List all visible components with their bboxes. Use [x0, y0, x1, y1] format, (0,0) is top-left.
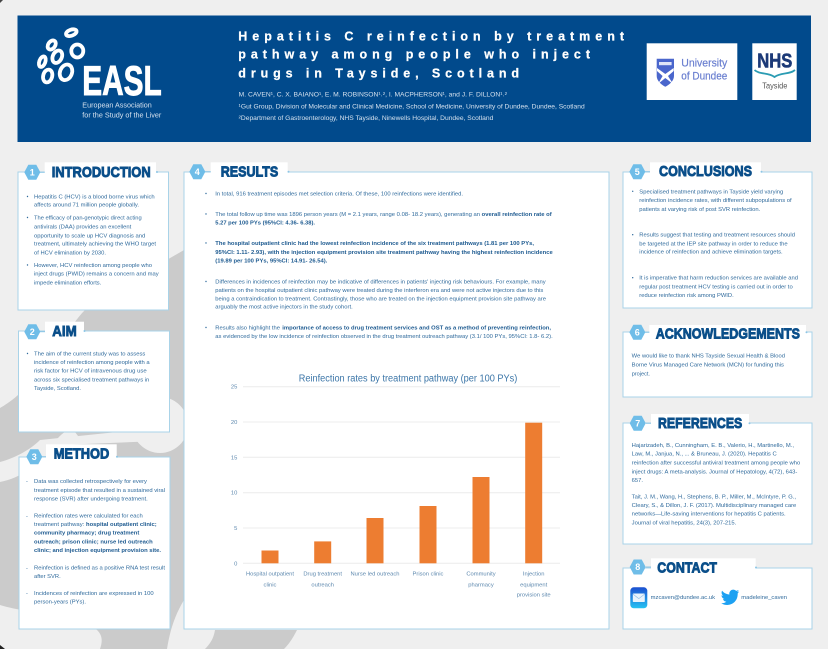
- body text: importance of access to drug treatment services and OST as a method of preventing reinfection,: [282, 325, 551, 331]
- body text: clinic; and injection equipment provision site.: [34, 548, 161, 554]
- email address: mzcaven@dundee.ac.uk: [651, 595, 715, 601]
- x axis labels: equipment: [520, 582, 548, 588]
- body text: impede elimination efforts.: [34, 280, 102, 286]
- x axis labels: clinic: [264, 582, 277, 588]
- body text: [205, 191, 553, 340]
- body text: -: [26, 565, 28, 571]
- body text: hospital outpatient clinic;: [86, 522, 157, 528]
- body text: incidence of reinfection and achieve elimination targets.: [639, 250, 783, 256]
- heading tab: 1: [30, 168, 35, 178]
- body text: patients at varying risk of post SVR reinfection.: [639, 207, 761, 213]
- title: pathway among people who inject: [238, 48, 591, 62]
- body text: However, HCV reinfection among people who: [34, 263, 152, 269]
- icon: Dundee shield: [657, 59, 674, 87]
- x axis labels: [246, 572, 551, 598]
- x axis labels: outreach: [311, 582, 334, 588]
- body text: Results suggest that testing and treatment resources should: [639, 233, 795, 239]
- body text: affects around 71 million people globally.: [34, 203, 139, 209]
- NHS Tayside logo: Tayside: [762, 81, 788, 90]
- y axis labels: 10: [231, 491, 237, 497]
- heading tab: 7: [635, 418, 640, 428]
- body text: Data was collected retrospectively for every: [34, 479, 147, 485]
- body text: response (SVR) after undergoing treatment.: [34, 497, 148, 503]
- body text: [27, 351, 151, 392]
- body text: risk factor for HCV of intravenous drug use: [34, 369, 147, 375]
- y axis labels: 5: [234, 526, 237, 532]
- chart title: Reinfection rates by treatment pathway (per 100 PYs): [299, 373, 517, 384]
- heading tab: CONTACT: [657, 559, 717, 576]
- body text: 95%CI: 1.11- 2.93), with the injection equipment provision site treatment pathway having the highest reinfection incidence: [215, 250, 553, 256]
- heading tab: 3: [32, 452, 37, 462]
- body text: Differences in incidences of reinfection may be indicative of differences in patients' injecting risk behaviours. For example, many: [215, 279, 546, 285]
- title: Hepatitis C reinfection by treatment: [238, 30, 625, 44]
- body text: Reinfection is defined as a positive RNA test result: [34, 565, 165, 571]
- header banner: [18, 16, 811, 142]
- x axis labels: Injection: [523, 572, 544, 578]
- body text: -: [26, 591, 28, 597]
- body text: We would like to thank NHS Tayside Sexual Health & Blood: [632, 353, 785, 359]
- icon: twitter bird: [721, 590, 739, 605]
- panel: results: [184, 162, 609, 629]
- body text: being a contraindication to treatment. Contrastingly, those who are treated on the injection equipment provision site pathway are: [215, 296, 546, 302]
- bars: [262, 423, 542, 563]
- x axis labels: Nurse led outreach: [351, 572, 399, 578]
- x axis labels: Community: [466, 572, 496, 578]
- panel: aim: [18, 322, 170, 432]
- twitter handle: madeleine_caven: [741, 595, 787, 601]
- body text: project.: [632, 372, 650, 378]
- body text: (19.89 per 100 PYs, 95%CI: 14.91- 26.54).: [215, 258, 328, 264]
- body text: networks—Life-saving interventions for hepatitis C patients.: [632, 512, 786, 518]
- University of Dundee logo: University: [681, 58, 728, 70]
- heading tab: CONCLUSIONS: [659, 163, 752, 180]
- body text: antivirals (DAA) provides an excellent: [34, 225, 132, 231]
- x axis labels: pharmacy: [468, 582, 494, 588]
- panel: conclusions: [623, 162, 812, 308]
- body text: Reinfection rates were calculated for each: [34, 514, 143, 520]
- body text: [26, 479, 165, 606]
- body text: -: [26, 479, 28, 485]
- panel: references: [623, 414, 812, 544]
- body text: The efficacy of pan-genotypic direct acting: [34, 215, 142, 221]
- body text: reinfection after successful antiviral treatment among people who: [632, 461, 800, 467]
- y axis labels: 0: [234, 561, 237, 567]
- body text: In total, 916 treatment episodes met selection criteria. Of these, 100 reinfections were identified.: [215, 191, 463, 197]
- logo caption: [82, 102, 162, 119]
- body text: Hajarizadeh, B., Cunningham, E. B., Valerio, H., Martinello, M.,: [632, 443, 794, 449]
- body text: inject drugs (PWID) remains a concern and may: [34, 272, 159, 278]
- heading tab: 6: [635, 328, 640, 338]
- body text: [27, 194, 159, 286]
- body text: patients on the hospital outpatient clinic pathway were treated during the interferon era and were not active injectors due to this: [215, 288, 544, 294]
- logo wordmark: EASL: [82, 57, 162, 104]
- panel: contact: [623, 558, 812, 629]
- body text: 657.: [632, 478, 643, 484]
- y axis labels: [231, 385, 237, 567]
- y axis labels: 15: [231, 455, 237, 461]
- x axis labels: provision site: [517, 592, 551, 598]
- body text: -: [26, 514, 28, 520]
- body text: Tayside, Scotland.: [34, 386, 81, 392]
- body text: Law, M., Janjua, N., ... & Bruneau, J. (2020). Hepatitis C: [632, 452, 777, 458]
- body text: community pharmacy; drug treatment: [34, 531, 139, 537]
- body text: 5.27 per 100 PYs (95%CI: 4.36- 6.38).: [215, 220, 315, 226]
- heading tab: 5: [635, 167, 640, 177]
- body text: Incidences of reinfection are expressed in 100: [34, 591, 154, 597]
- authors and affiliations: [239, 92, 585, 122]
- heading tab: RESULTS: [221, 163, 278, 180]
- body text: arguably the most active injectors in the study cohort.: [215, 305, 353, 311]
- body text: Results also highlight the: [215, 325, 280, 331]
- logo caption: European Association: [82, 102, 152, 109]
- body text: treatment episode that resulted in a sustained viral: [34, 488, 165, 494]
- body text: Borne Virus Managed Care Network (MCN) for funding this: [632, 363, 784, 369]
- panel: acknowledgements: [623, 325, 812, 397]
- NHS Tayside logo: NHS: [757, 51, 792, 73]
- panel: method: [19, 444, 170, 629]
- University of Dundee logo: of Dundee: [681, 70, 727, 82]
- bar chart: [231, 373, 560, 598]
- x axis labels: Drug treatment: [303, 572, 342, 578]
- body text: across six specialised treatment pathways in: [34, 377, 149, 383]
- panel: introduction: [18, 162, 168, 310]
- body text: It is imperative that harm reduction services are available and: [639, 276, 798, 282]
- heading tab: 8: [635, 562, 640, 572]
- heading tab: ACKNOWLEDGEMENTS: [656, 326, 800, 343]
- body text: as evidenced by the low incidence of reinfection observed in the drug treatment outreach pathway (3.1/ 100 PYs, 95%CI: 1.8- 6.2).: [215, 334, 553, 340]
- University of Dundee logo: [647, 43, 737, 100]
- body text: Journal of viral hepatitis, 24(3), 207-215.: [632, 521, 737, 527]
- body text: treatment, ultimately achieving the WHO target: [34, 242, 156, 248]
- icon: EASL hexagon cluster: [38, 28, 83, 83]
- body text: inject drugs: A meta-analysis. Journal of Hepatology, 4(72), 643-: [632, 469, 797, 475]
- EASL logo: [38, 28, 162, 119]
- heading tab: [630, 558, 757, 577]
- body text: after SVR.: [34, 574, 61, 580]
- body text: of HCV elimination by 2030.: [34, 250, 106, 256]
- body text: [632, 443, 800, 527]
- body text: [632, 189, 798, 299]
- heading tab: [24, 322, 86, 340]
- body text: incidence of reinfection among people with a: [34, 360, 151, 366]
- body text: Hepatitis C (HCV) is a blood borne virus which: [34, 194, 155, 200]
- body text: The total follow up time was 1896 person years (M = 2.1 years, range 0.08- 18.2 years), generating an: [215, 212, 480, 218]
- NHS Tayside logo: [752, 43, 797, 100]
- y axis labels: 20: [231, 420, 237, 426]
- heading tab: [189, 162, 290, 180]
- body text: reinfection incidence rates, with different subpopulations of: [639, 198, 792, 204]
- heading tab: METHOD: [54, 446, 109, 463]
- body text: The hospital outpatient clinic had the lowest reinfection incidence of the six treatment pathways (1.81 per 100 PYs,: [215, 241, 534, 247]
- title: drugs in Tayside, Scotland: [238, 66, 519, 80]
- heading tab: [26, 444, 118, 464]
- body text: Tait, J. M., Wang, H., Stephens, B. P., Miller, M., McIntyre, P. G.,: [632, 494, 796, 500]
- body text: outreach; prison clinic; nurse led outreach: [34, 539, 153, 545]
- y axis labels: 25: [231, 385, 237, 391]
- heading tab: 4: [195, 167, 200, 177]
- body text: reduce reinfection risk among PWID.: [639, 293, 734, 299]
- heading tab: [24, 162, 158, 181]
- authors and affiliations: M. CAVEN¹, C. X. BAIANO¹, E. M. ROBINSON¹˒², I. MACPHERSON¹, and J. F. DILLON¹˒²: [239, 92, 508, 99]
- authors and affiliations: ²Department of Gastroenterology, NHS Tayside, Ninewells Hospital, Dundee, Scotland: [239, 115, 494, 122]
- heading tab: [630, 414, 750, 432]
- title: [238, 30, 625, 80]
- body text: The aim of the current study was to assess: [34, 351, 146, 357]
- x axis labels: Prison clinic: [413, 572, 444, 578]
- body text: Specialised treatment pathways in Tayside yield varying: [639, 189, 783, 195]
- body text: Cleary, S., & Dillon, J. F. (2017). Multidisciplinary managed care: [632, 503, 796, 509]
- body text: opportunity to scale up HCV diagnosis and: [34, 233, 145, 239]
- heading tab: INTRODUCTION: [52, 164, 151, 181]
- body text: be targeted at the IEP site pathway in order to reduce the: [639, 241, 788, 247]
- body text: treatment pathway:: [34, 522, 85, 528]
- heading tab: 2: [30, 327, 35, 337]
- heading tab: REFERENCES: [658, 415, 742, 432]
- body text: [632, 353, 785, 378]
- body text: overall reinfection rate of: [482, 212, 552, 218]
- icon: NHS wave: [754, 70, 795, 77]
- body text: regular post treatment HCV testing is carried out in order to: [639, 285, 793, 291]
- x axis labels: Hospital outpatient: [246, 572, 294, 578]
- icon: email: [630, 587, 647, 608]
- body text: person-years (PYs).: [34, 600, 86, 606]
- authors and affiliations: ¹Gut Group, Division of Molecular and Clinical Medicine, School of Medicine, University of Dundee, Dundee, Scotland: [239, 104, 585, 111]
- heading tab: AIM: [52, 323, 77, 340]
- logo caption: for the Study of the Liver: [82, 112, 162, 119]
